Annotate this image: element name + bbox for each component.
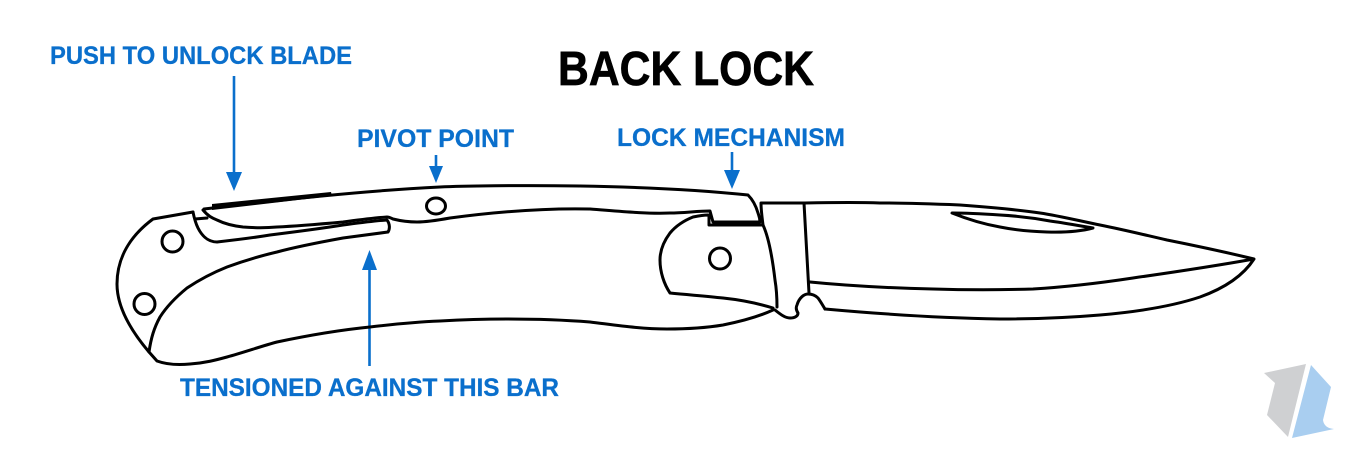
arrow: tensioned against this bar <box>362 250 377 366</box>
label: tensioned against this bar: TENSIONED AGAINST THIS BAR <box>180 374 559 402</box>
label: push to unlock blade: PUSH TO UNLOCK BLADE <box>50 42 352 70</box>
blade <box>804 202 1254 319</box>
handle inner scale and bar <box>149 212 389 352</box>
arrow: pivot point <box>429 155 443 183</box>
title: BACK LOCK <box>558 43 814 96</box>
thumb hole <box>952 213 1093 232</box>
arrow: lock mechanism <box>724 152 740 189</box>
knife illustration <box>117 186 1254 365</box>
arrow: push to unlock blade <box>226 76 242 191</box>
handle outline <box>117 212 773 365</box>
spring and back lock lever <box>203 186 760 228</box>
bar stud notch <box>195 218 207 219</box>
label: lock mechanism: LOCK MECHANISM <box>617 124 845 152</box>
logo <box>1264 364 1334 438</box>
pivot pins <box>134 198 730 314</box>
label: pivot point: PIVOT POINT <box>357 125 514 153</box>
front scale of handle <box>660 215 777 308</box>
blade tang <box>761 203 825 318</box>
thick unlock surface <box>212 192 332 210</box>
